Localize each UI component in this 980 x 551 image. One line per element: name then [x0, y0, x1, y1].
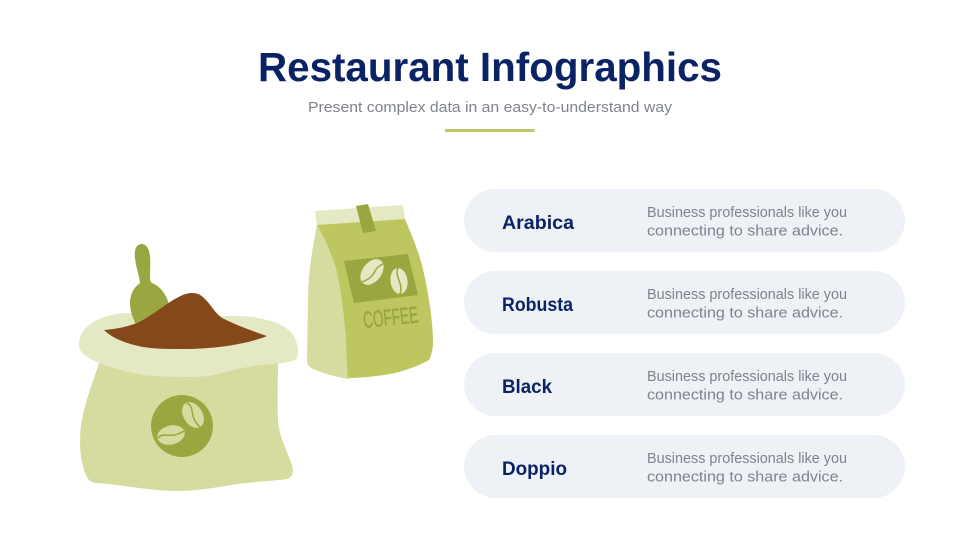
- heading: Arabica: [502, 213, 574, 234]
- panel: Arabica: [464, 189, 905, 252]
- description: Business professionals like you: [647, 205, 847, 221]
- description: connecting to share advice.: [647, 306, 843, 322]
- title underline: [445, 129, 534, 132]
- heading: Doppio: [502, 459, 567, 480]
- description: connecting to share advice.: [647, 224, 843, 240]
- scoop: [130, 244, 169, 325]
- coffee grounds: [104, 293, 267, 349]
- sack body: [80, 358, 293, 491]
- sack collar: [79, 313, 298, 377]
- panel: Doppio: [464, 435, 905, 498]
- description: Business professionals like you: [647, 369, 847, 385]
- heading: Black: [502, 377, 552, 398]
- illustration: coffee bag: [307, 204, 433, 379]
- bag label with beans: [344, 254, 418, 303]
- bag tab: [356, 204, 376, 233]
- description: Business professionals like you: [647, 287, 847, 303]
- description: connecting to share advice.: [647, 470, 843, 486]
- description: Business professionals like you: [647, 451, 847, 467]
- subtitle: Present complex data in an easy-to-understand way: [308, 99, 673, 116]
- illustration: coffee sack: [79, 244, 298, 491]
- description: connecting to share advice.: [647, 388, 843, 404]
- sack badge with beans: [151, 395, 213, 457]
- title: Restaurant Infographics: [258, 44, 722, 90]
- bag top strip: [315, 205, 405, 226]
- bag front panel: [317, 219, 433, 378]
- bag COFFEE text: COFFEE: [362, 301, 419, 333]
- bag side panel: [307, 225, 360, 379]
- panel: Black: [464, 353, 905, 416]
- panel: Robusta: [464, 271, 905, 334]
- heading: Robusta: [502, 295, 573, 316]
